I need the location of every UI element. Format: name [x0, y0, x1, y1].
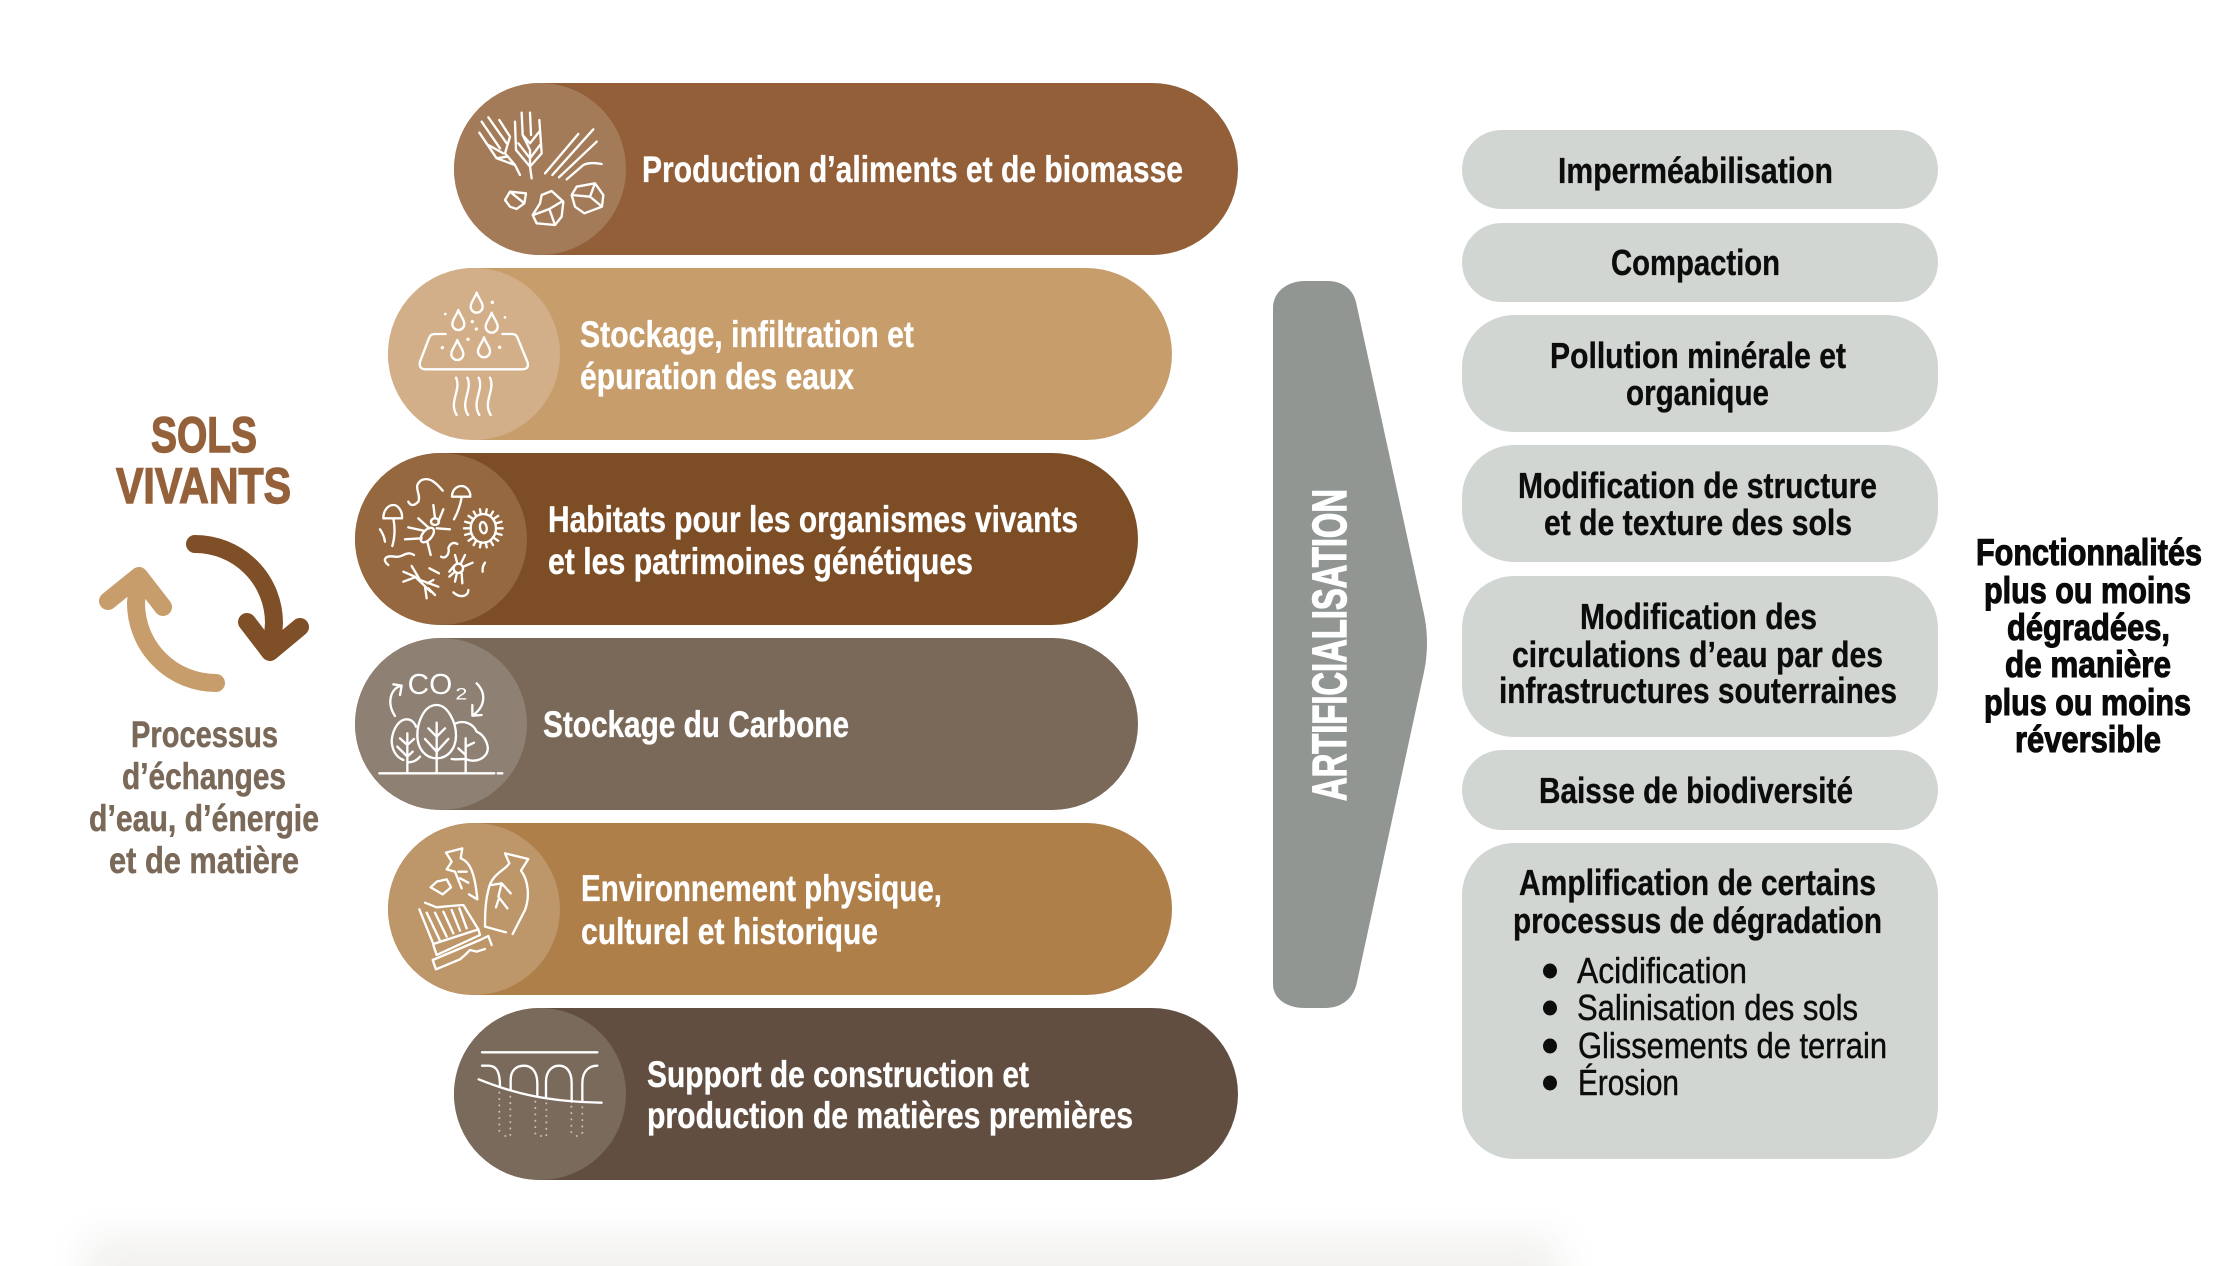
- panel: habitats: [355, 453, 1138, 625]
- panel: sols vivants: [89, 407, 319, 881]
- box: structure et texture: et de texture des sols: [1544, 502, 1852, 543]
- list: processus: Glissements de terrain: [1578, 1025, 1887, 1066]
- icon: wheat and rocks: [479, 113, 603, 225]
- text: processus: d’échanges: [122, 756, 286, 797]
- box: biodiversité: Baisse de biodiversité: [1539, 770, 1853, 811]
- icon: CO2 and trees: 2: [455, 684, 467, 703]
- box: pollution: Pollution minérale et: [1550, 335, 1846, 376]
- icon: cycle arrows: [108, 544, 300, 683]
- panel: environnement: [388, 823, 1172, 995]
- panel: stockage du carbone: [355, 638, 1138, 810]
- arrow: artificialisation: ARTIFICIALISATION: [1304, 489, 1357, 801]
- box: structure et texture: Modification de structure: [1518, 465, 1877, 506]
- text: processus: [89, 714, 319, 881]
- box: structure et texture: [1462, 445, 1938, 562]
- icon: broken vases and column: [419, 848, 528, 969]
- label: habitats: Habitats pour les organismes vivants: [548, 499, 1078, 540]
- text: fonctionnalités dégradées: dégradées,: [2007, 607, 2170, 648]
- label: support: production de matières premières: [647, 1095, 1133, 1136]
- label: stockage: épuration des eaux: [580, 356, 854, 397]
- box: circulations d'eau: infrastructures souterraines: [1499, 670, 1897, 711]
- box: imperméabilisation: [1462, 130, 1938, 209]
- label: support: [647, 1054, 1133, 1136]
- text: fonctionnalités dégradées: réversible: [2015, 719, 2161, 760]
- box: imperméabilisation: Imperméabilisation: [1558, 150, 1833, 191]
- text: processus: et de matière: [109, 840, 299, 881]
- label: habitats: et les patrimoines génétiques: [548, 541, 973, 582]
- box: circulations d'eau: [1462, 576, 1938, 737]
- panel: production d'aliments: [454, 83, 1238, 255]
- icon: water infiltration: [420, 293, 528, 415]
- box: pollution: organique: [1626, 372, 1769, 413]
- box: compaction: Compaction: [1611, 242, 1780, 283]
- heading: sols vivants: VIVANTS: [116, 458, 291, 514]
- box: processus de dégradation: processus de dégradation: [1513, 900, 1882, 941]
- label: support: Support de construction et: [647, 1054, 1029, 1095]
- box: compaction: [1462, 223, 1938, 302]
- panel: stockage des eaux: [388, 268, 1172, 440]
- box: pollution: [1462, 315, 1938, 432]
- box: circulations d'eau: Modification des: [1580, 596, 1817, 637]
- heading: sols vivants: [116, 407, 291, 514]
- text: processus: Processus: [131, 714, 278, 755]
- list: processus: Salinisation des sols: [1577, 987, 1858, 1028]
- label: stockage: [580, 314, 914, 397]
- label: environnement: [581, 868, 942, 952]
- box: biodiversité: [1462, 750, 1938, 830]
- arrow: artificialisation: [1273, 281, 1427, 1008]
- text: fonctionnalités dégradées: [1976, 532, 2202, 760]
- list: processus: Acidification: [1577, 950, 1747, 991]
- panel: support de construction: [454, 1008, 1238, 1180]
- box: circulations d'eau: circulations d’eau par des: [1512, 634, 1883, 675]
- label: carbone: Stockage du Carbone: [543, 704, 849, 745]
- label: environnement: Environnement physique,: [581, 868, 942, 909]
- list: processus: [1543, 950, 1887, 1103]
- box: processus de dégradation: Amplification de certains: [1519, 862, 1876, 903]
- icon: CO2 and trees: [379, 669, 502, 773]
- text: fonctionnalités dégradées: plus ou moins: [1984, 570, 2191, 611]
- box: processus de dégradation: [1462, 843, 1938, 1159]
- list: processus: Érosion: [1578, 1062, 1679, 1103]
- label: habitats: [548, 499, 1078, 582]
- label: environnement: culturel et historique: [581, 911, 878, 952]
- text: fonctionnalités dégradées: plus ou moins: [1984, 682, 2191, 723]
- icon: aqueduct: [479, 1052, 602, 1137]
- text: fonctionnalités dégradées: de manière: [2005, 644, 2171, 685]
- label: stockage: Stockage, infiltration et: [580, 314, 914, 355]
- heading: sols vivants: SOLS: [151, 407, 257, 463]
- text: processus: d’eau, d’énergie: [89, 798, 319, 839]
- icon: soil organisms: [380, 479, 503, 598]
- label: production: Production d’aliments et de biomasse: [642, 149, 1183, 190]
- icon: CO2 and trees: CO: [408, 669, 452, 701]
